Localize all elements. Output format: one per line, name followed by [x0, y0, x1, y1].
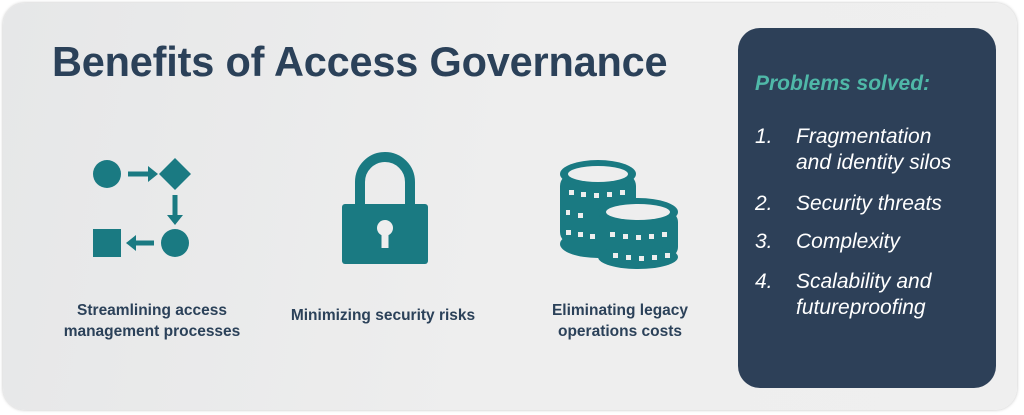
panel: problems solved: Security threats: [796, 192, 942, 215]
label: streamlining: Streamlining access: [77, 302, 227, 319]
icon: coins: [560, 160, 678, 269]
panel: problems solved: Fragmentation: [796, 125, 931, 148]
label: minimizing: Minimizing security risks: [291, 307, 475, 324]
panel: problems solved: futureproofing: [796, 296, 926, 319]
panel: problems solved: and identity silos: [796, 151, 951, 174]
label: streamlining: management processes: [64, 323, 240, 340]
panel: problems solved: Scalability and: [796, 270, 931, 293]
label: streamlining: [64, 302, 240, 340]
panel: problems solved: [738, 28, 996, 388]
list item 1: 1.: [755, 125, 773, 148]
panel heading: Problems solved:: [755, 72, 930, 95]
list item 2: [754, 192, 942, 215]
list item 3: 3.: [755, 230, 773, 253]
title: Benefits of Access Governance: [52, 38, 667, 85]
icon: padlock: [342, 152, 428, 264]
panel: problems solved: Complexity: [796, 230, 900, 253]
list item 3: [755, 230, 901, 253]
list item 4: 4.: [755, 270, 773, 293]
icon: process flow: [93, 158, 191, 257]
list item 2: 2.: [755, 192, 773, 215]
label: eliminating: Eliminating legacy operations costs: [552, 302, 688, 340]
list item 1: [755, 125, 951, 174]
list item 4: [755, 270, 932, 319]
